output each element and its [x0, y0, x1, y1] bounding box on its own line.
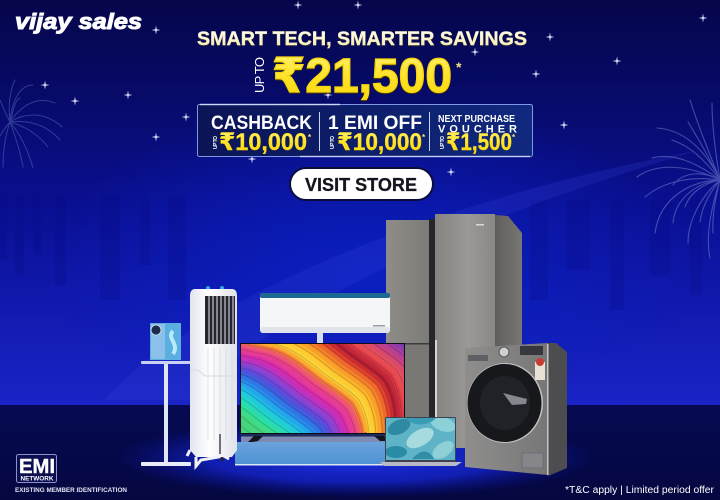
offer: voucher — [438, 114, 517, 156]
offer: cashback — [211, 112, 312, 156]
terms note: *T&C apply | Limited period offer — [565, 485, 715, 496]
offer: voucher: * — [512, 133, 516, 142]
side table — [141, 361, 191, 364]
offer: voucher: UP TO — [440, 136, 446, 149]
button: visit store: VISIT STORE — [305, 174, 417, 195]
firework left — [0, 80, 62, 168]
badge: EMI network — [15, 454, 127, 494]
badge: EMI network: NETWORK — [20, 476, 54, 482]
tv stand base — [235, 434, 391, 466]
offer: 1 EMI off: UP TO — [330, 136, 336, 149]
phone on side table — [141, 323, 191, 466]
firework right — [637, 100, 720, 258]
offer: cashback: UP TO — [213, 136, 219, 149]
badge: EMI network: EMI — [19, 455, 55, 478]
refrigerator — [386, 214, 522, 448]
sparkle stars — [40, 0, 708, 176]
asterisk: * — [456, 59, 462, 75]
laptop — [380, 413, 462, 466]
offer: 1 EMI off: * — [422, 133, 426, 142]
tv screen waves — [241, 344, 404, 433]
offer panel — [198, 104, 532, 156]
offer: cashback: CASHBACK — [211, 112, 312, 134]
offer: cashback: * — [308, 133, 312, 142]
offer: voucher: VOUCHER — [438, 124, 517, 136]
air conditioner — [260, 293, 390, 343]
offer: 1 EMI off: 1 EMI OFF — [328, 112, 422, 134]
title: SMART TECH, SMARTER SAVINGS — [197, 28, 527, 50]
phone — [150, 323, 181, 360]
headline amount — [252, 50, 462, 103]
up to label: UP TO — [252, 57, 267, 93]
badge caption: EXISTING MEMBER IDENTIFICATION — [15, 487, 127, 494]
logo: vijay sales: vijay sales — [15, 9, 142, 34]
offer: voucher: ₹1,500 — [446, 129, 512, 156]
button: visit store — [290, 168, 433, 200]
offer: voucher: NEXT PURCHASE — [438, 114, 515, 125]
background: stage floor — [0, 405, 720, 500]
air cooler — [187, 286, 237, 466]
offer: 1 EMI off: ₹10,000 — [337, 129, 422, 156]
television — [240, 343, 405, 434]
amount text: ₹21,500 — [272, 50, 452, 103]
offer: 1 EMI off — [328, 112, 426, 156]
offer: cashback: ₹10,000 — [219, 129, 307, 156]
washing machine — [465, 343, 567, 476]
background: night sky — [0, 42, 720, 405]
